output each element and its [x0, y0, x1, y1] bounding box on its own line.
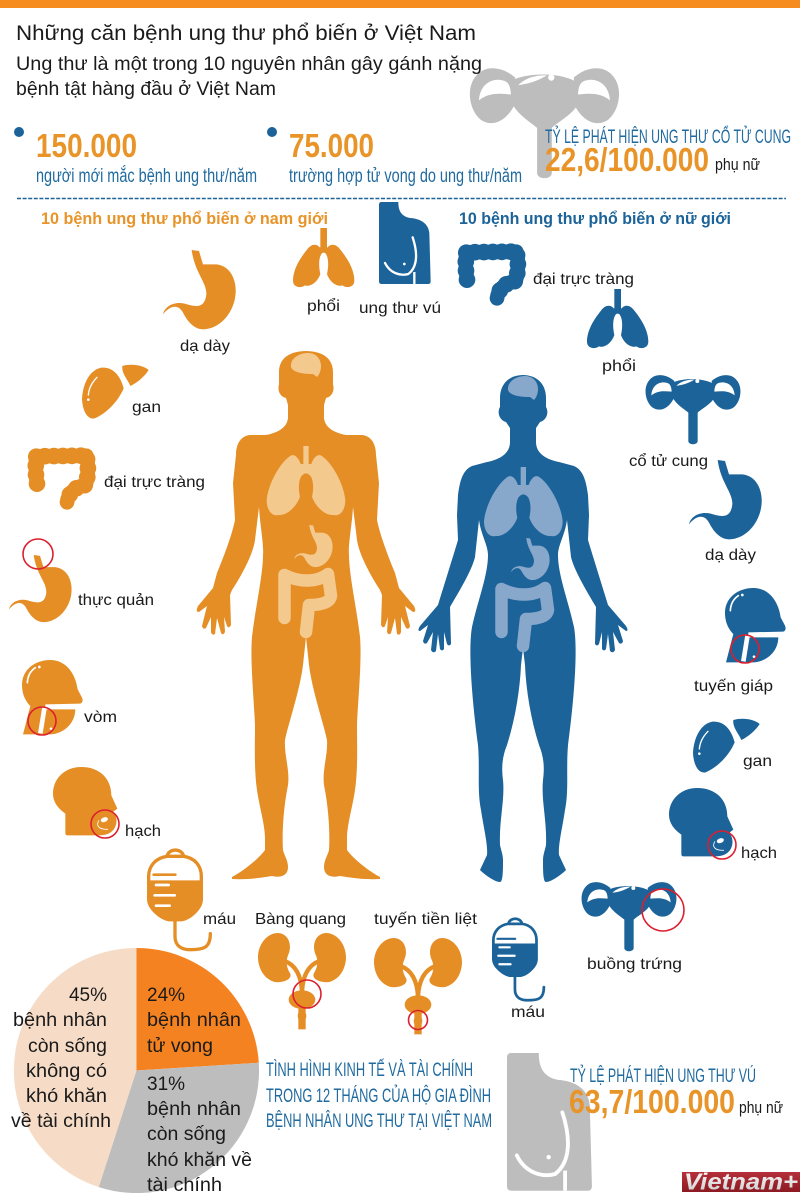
pie chart: household finances [11, 948, 259, 1196]
icon: female liver [693, 719, 760, 773]
icon: male stomach [163, 250, 236, 329]
slice: 24% died [136, 948, 259, 1070]
icon: female colon [466, 252, 518, 298]
slice: 45% no difficulty: 45% [69, 985, 107, 1006]
icon: thyroid [725, 588, 786, 663]
label: đại trực tràng (female): đại trực tràng [533, 271, 634, 288]
top band [0, 0, 800, 8]
label: dạ dày (male): dạ dày [180, 338, 230, 355]
slice: 45% no difficulty: về tài chính [11, 1111, 111, 1132]
stat: deaths: 75.000 [289, 127, 374, 164]
heading: men: 10 bệnh ung thư phổ biến ở nam giới [41, 209, 328, 228]
label: ung thư vú: ung thư vú [359, 300, 441, 317]
icon: large grey breast [507, 1053, 592, 1191]
stat: breast cancer rate [569, 1065, 783, 1120]
label: phổi (male): phổi [307, 297, 340, 315]
label: hạch (female): hạch [741, 845, 777, 862]
stat: cervical cancer rate [545, 126, 791, 178]
slice: 24% died: 24% [147, 985, 185, 1006]
label: tuyến tiền liệt: tuyến tiền liệt [374, 911, 478, 928]
slice: 31% difficulty: 31% [147, 1074, 185, 1095]
icon: nasopharynx [22, 660, 83, 735]
slice: 45% no difficulty: bệnh nhân [13, 1010, 107, 1031]
label: hạch (male): hạch [125, 823, 161, 840]
icon: ovary [582, 882, 684, 951]
label: cổ tử cung: cổ tử cung [629, 452, 708, 470]
icon: female lungs [587, 289, 648, 348]
pie caption: BỆNH NHÂN UNG THƯ TẠI VIỆT NAM [266, 1110, 492, 1132]
slice: 45% no difficulty: còn sống [28, 1036, 107, 1057]
icon: cervix [646, 375, 740, 444]
icon: blood bag female [493, 919, 544, 1000]
label: dạ dày (female): dạ dày [705, 547, 756, 564]
male body figure [197, 351, 415, 879]
icon: blood bag male [149, 850, 210, 950]
slice: 31% difficulty [99, 1063, 259, 1196]
slice: 31% difficulty: khó khăn về [147, 1150, 252, 1171]
stat: breast cancer rate: phụ nữ [739, 1098, 783, 1117]
slice: 31% difficulty: tài chính [147, 1175, 222, 1196]
stat: new cases: người mới mắc bệnh ung thư/năm [36, 165, 257, 187]
slice: 45% no difficulty: không có [26, 1061, 107, 1082]
subtitle: bệnh tật hàng đầu ở Việt Nam [16, 78, 276, 100]
icon: male lungs [293, 228, 354, 287]
icon: lymph node female [669, 788, 736, 859]
slice: 31% difficulty: còn sống [147, 1124, 226, 1145]
logo: Vietnam+: Vietnam+ [684, 1168, 798, 1194]
subtitle [16, 53, 482, 100]
slice: 31% difficulty: bệnh nhân [147, 1099, 241, 1120]
label: phổi (female): phổi [602, 357, 636, 375]
stat: cervical cancer rate: 22,6/100.000 [545, 141, 709, 178]
stat: breast cancer rate: 63,7/100.000 [569, 1083, 735, 1120]
label: vòm: vòm [84, 709, 117, 726]
icon: bladder [258, 933, 346, 1029]
stat: deaths: trường hợp tử vong do ung thư/năm [289, 166, 522, 187]
slice: 24% died: tử vong [147, 1036, 213, 1057]
icon: female stomach [689, 460, 762, 539]
icon: male liver [82, 365, 149, 419]
title: Những căn bệnh ung thư phổ biến ở Việt Nam [16, 22, 476, 45]
label: thực quản: thực quản [78, 592, 154, 609]
label: máu (male): máu [203, 911, 236, 928]
icon: lymph node male [53, 767, 119, 838]
icon: breast (blue) [379, 202, 431, 284]
icon: prostate [374, 938, 462, 1034]
icon: large grey uterus [470, 68, 619, 178]
slice: 45% no difficulty [11, 948, 136, 1187]
label: tuyến giáp: tuyến giáp [694, 678, 773, 695]
label: gan (male): gan [132, 399, 161, 416]
icon: oesophagus [9, 539, 72, 622]
heading: women: 10 bệnh ung thư phổ biến ở nữ giới [459, 209, 731, 228]
stat: new cases [14, 127, 257, 187]
label: Bàng quang: Bàng quang [255, 911, 346, 928]
label: gan (female): gan [743, 753, 772, 770]
pie caption: TÌNH HÌNH KINH TẾ VÀ TÀI CHÍNH [266, 1059, 473, 1081]
pie caption: TRONG 12 THÁNG CỦA HỘ GIA ĐÌNH [266, 1085, 491, 1107]
subtitle: Ung thư là một trong 10 nguyên nhân gây gánh nặng [16, 53, 482, 75]
pie caption [266, 1059, 492, 1132]
stat: deaths [267, 127, 522, 187]
stat: new cases: 150.000 [36, 127, 137, 164]
slice: 45% no difficulty: khó khăn [26, 1086, 107, 1107]
slice: 24% died: bệnh nhân [147, 1010, 241, 1031]
label: buồng trứng: buồng trứng [587, 956, 682, 973]
stat: cervical cancer rate: phụ nữ [715, 155, 760, 174]
icon: male colon [36, 456, 88, 502]
label: đại trực tràng (male): đại trực tràng [104, 474, 205, 491]
label: máu (female): máu [511, 1004, 545, 1021]
female body figure [418, 375, 628, 882]
